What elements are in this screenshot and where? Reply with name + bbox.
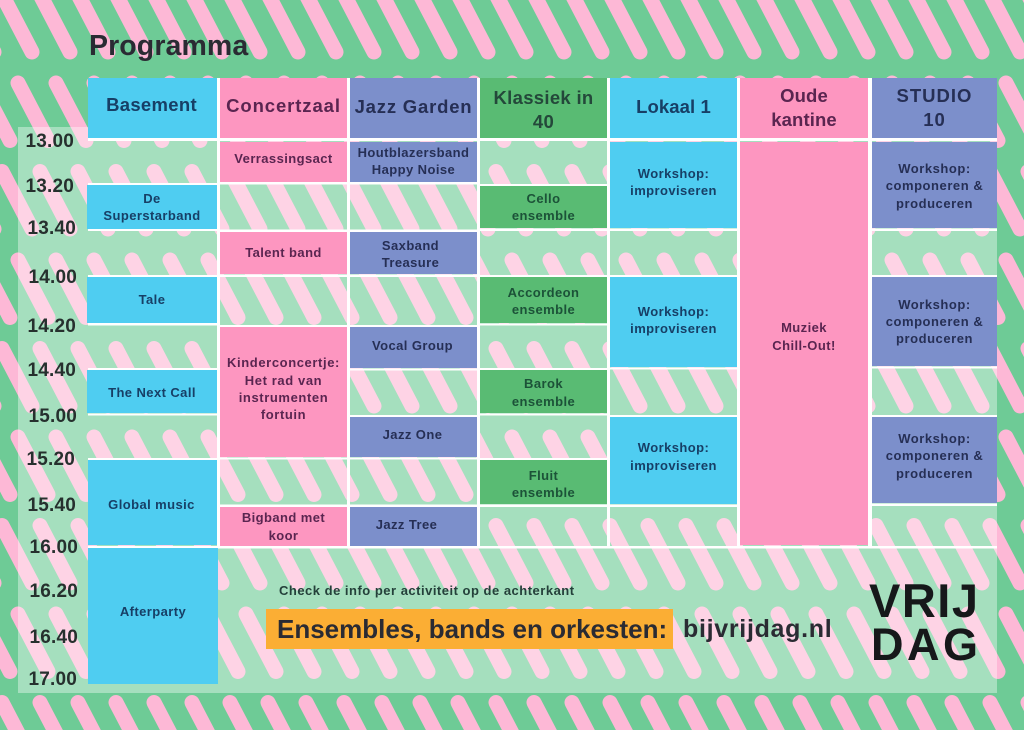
act: Bigband met koor: koor [269,528,298,542]
act: Afterparty [88,548,218,684]
workshop: improviseren 1 [610,142,737,228]
act: Jazz One: Jazz One [383,427,442,442]
time axis: 13.20 [25,176,74,197]
workshop: improviseren 2 [610,277,737,367]
workshop: componeren 3: Workshop: [898,431,971,446]
workshop: improviseren 3 [610,417,737,504]
act: Kinderconcertje: Kinderconcertje: [227,355,340,370]
header: STUDIO 10: STUDIO [897,85,972,106]
act: Global music: Global music [108,497,195,512]
act: Talent band: Talent band [245,245,322,260]
workshop: componeren 1: produceren [896,196,973,211]
workshop: improviseren 2: improviseren [630,321,717,336]
header: Concertzaal: Concertzaal [226,95,341,116]
act: Houtblazersband Happy Noise: Houtblazersband [358,145,469,160]
act: Jazz One [350,417,477,457]
act: Jazz Tree [350,507,477,546]
workshop: componeren 2: produceren [896,331,973,346]
workshop: componeren 3 [872,417,997,503]
act: Vocal Group: Vocal Group [372,338,453,353]
header: Jazz Garden [350,78,477,138]
orange banner: Ensembles, bands en orkesten: [277,614,667,644]
website url: bijvrijdag.nl [683,615,832,643]
workshop: componeren 3: produceren [896,466,973,481]
workshop: improviseren 1: improviseren [630,183,717,198]
act: Jazz Tree: Jazz Tree [376,517,437,532]
act: Tale [87,277,217,323]
workshop: componeren 3: componeren & [886,448,983,463]
act: Bigband met koor: Bigband met [242,510,325,525]
act: Vocal Group [350,327,477,368]
act: Fluit ensemble: ensemble [512,485,575,500]
act: De Superstarband: Superstarband [103,208,201,223]
time axis: 15.00 [28,406,77,427]
act: Saxband Treasure [350,232,477,274]
act: Kinderconcertje [220,327,347,457]
column: Concertzaal [220,142,347,546]
time axis: 15.20 [26,449,75,470]
act: Barok ensemble: Barok [524,376,563,391]
column: Lokaal 1 [610,142,737,504]
act: Accordeon ensemble: ensemble [512,302,575,317]
act: Accordeon ensemble [480,277,607,323]
act: Houtblazersband Happy Noise [350,142,477,182]
act: Fluit ensemble [480,460,607,504]
header: Basement [88,78,217,138]
header: Klassiek in 40: Klassiek in [494,87,593,108]
time axis: 15.40 [27,495,76,516]
workshop: componeren 2: Workshop: [898,297,971,312]
act: Verrassingsact: Verrassingsact [234,151,333,166]
column: Klassiek in 40 [480,186,607,504]
header: Lokaal 1 [610,78,737,138]
act: The Next Call [87,370,217,413]
column headers [88,78,997,138]
act: De Superstarband: De [143,191,161,206]
column: STUDIO 10 [872,142,997,503]
header: Concertzaal [220,78,347,138]
workshop: improviseren 1: Workshop: [638,166,709,181]
workshop: componeren 1: Workshop: [898,161,971,176]
header: Klassiek in 40: 40 [533,111,554,132]
act: Accordeon ensemble: Accordeon [508,285,579,300]
act: Afterparty: Afterparty [120,604,186,619]
workshop: improviseren 3: Workshop: [638,440,709,455]
header: Klassiek in 40 [480,78,607,138]
time axis: 16.20 [29,581,78,602]
act: Cello ensemble [480,186,607,228]
workshop: improviseren 2: Workshop: [638,304,709,319]
act: Kinderconcertje: instrumenten [239,390,328,405]
workshop: componeren 2 [872,277,997,366]
header: STUDIO 10 [872,78,997,138]
act: The Next Call: The Next Call [108,385,196,400]
act: Fluit ensemble: Fluit [529,468,558,483]
column: Oude kantine, Muziek Chill-Out [740,142,868,545]
act: Verrassingsact [220,142,347,182]
act: De Superstarband [87,185,217,229]
act: Saxband Treasure: Saxband [382,238,439,253]
workshop: improviseren 3: improviseren [630,458,717,472]
workshop: componeren 1 [872,142,997,228]
act: Global music [88,460,217,545]
time axis: 13.40 [27,218,76,239]
workshop: componeren 2: componeren & [886,314,983,329]
time axis: 17.00 [28,669,77,690]
act: Barok ensemble: ensemble [512,394,575,408]
header: Oude kantine: kantine [771,109,837,130]
act: Kinderconcertje: Het rad van [245,373,322,388]
title: Programma [89,30,248,62]
time axis: 16.00 [29,537,78,558]
act: Cello ensemble: Cello [527,191,560,206]
header: Oude kantine [740,78,868,138]
time axis: 14.20 [27,316,76,337]
workshop: componeren 1: componeren & [886,178,983,193]
act: Saxband Treasure: Treasure [382,255,439,270]
time axis [25,131,78,690]
logo: VRIJ DAG: VRIJ [869,575,978,627]
column: Oude kantine, Muziek Chill-Out: Chill-Out! [772,338,836,352]
header: Oude kantine: Oude [780,85,828,106]
act: Barok ensemble [480,370,607,413]
logo: VRIJ DAG: DAG [871,619,978,670]
column: Jazz Garden [350,142,477,546]
act: Talent band [220,232,347,274]
logo: VRIJ DAG [869,575,978,670]
act: Bigband met koor [220,507,347,546]
column: Oude kantine, Muziek Chill-Out: Muziek [781,320,827,335]
time axis: 14.40 [27,360,76,381]
header: Lokaal 1: Lokaal 1 [636,96,711,117]
time axis: 16.40 [29,627,78,648]
time labels: 13.00 [25,131,74,152]
time axis: 14.00 [28,267,77,288]
act: Tale: Tale [139,292,165,307]
header: Basement: Basement [106,94,197,115]
header: STUDIO 10: 10 [923,109,946,130]
act: Cello ensemble: ensemble [512,208,575,223]
header: Jazz Garden: Jazz Garden [355,96,472,117]
column: Basement [87,185,218,684]
act: Kinderconcertje: fortuin [261,407,306,422]
act: Houtblazersband Happy Noise: Happy Noise [372,162,455,177]
info note: Check de info per activiteit op de achterkant [279,583,575,598]
